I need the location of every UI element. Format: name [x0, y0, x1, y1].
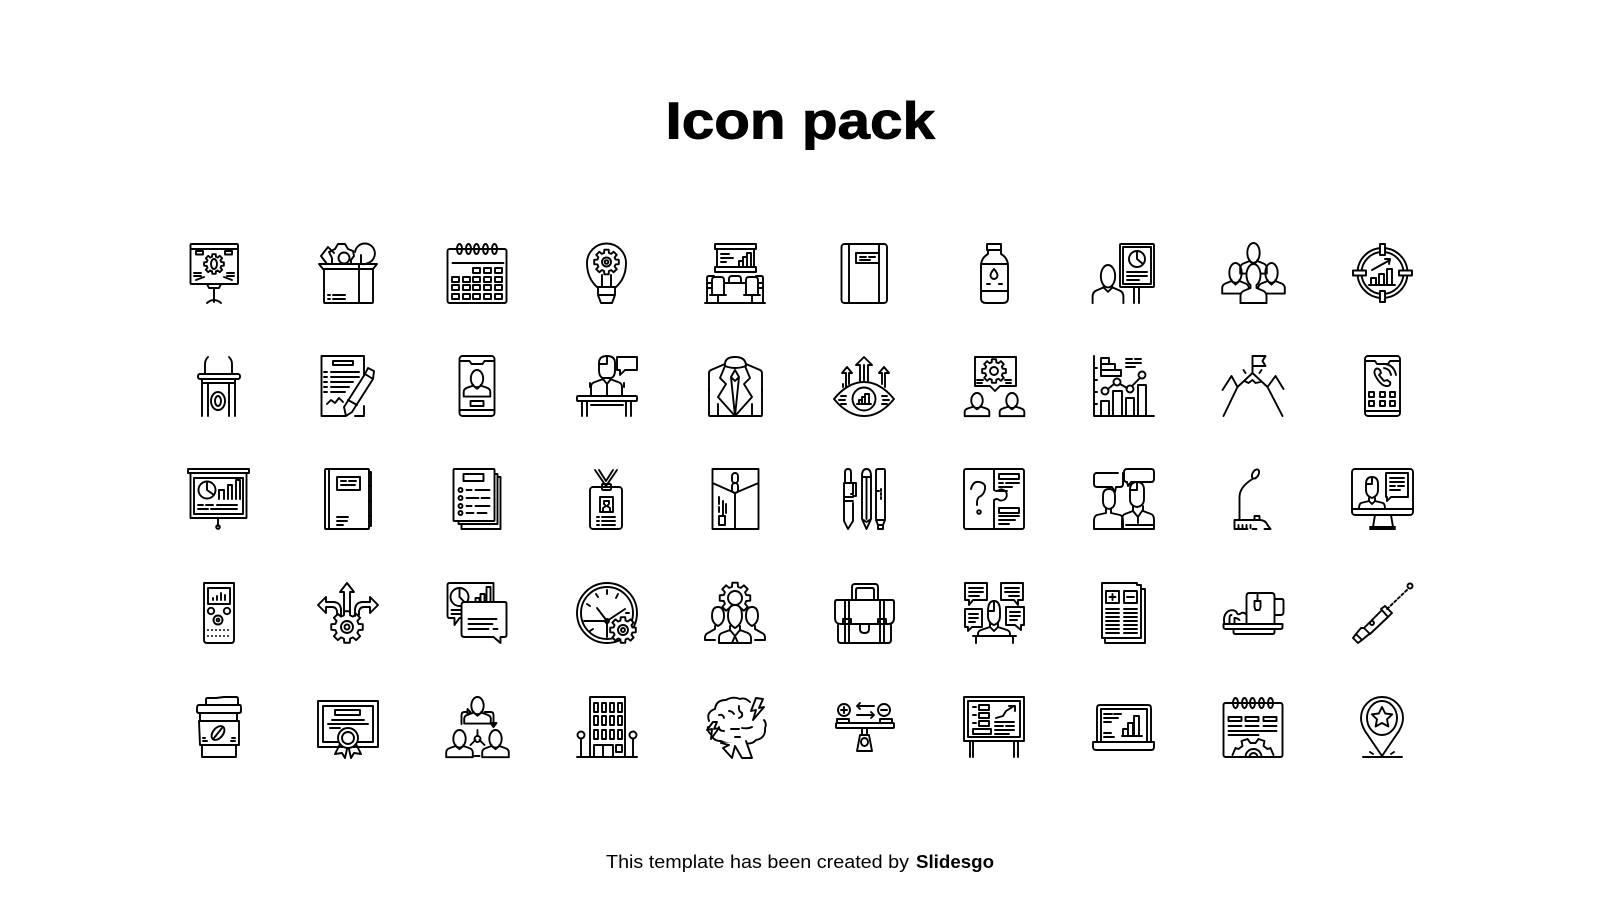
icon: phone with call	[1365, 356, 1400, 416]
icon: conference microphone	[1234, 468, 1270, 529]
icon: two people talking	[1094, 469, 1154, 529]
icon: notebook with tabs	[325, 469, 371, 529]
icon: team with gears	[705, 583, 765, 643]
icon: calendar	[448, 244, 506, 303]
icon: mug and pastry on tray	[1224, 593, 1284, 634]
icon: document stack	[454, 469, 500, 529]
icon: arrows from gear	[318, 583, 378, 643]
icon: document with pen	[322, 356, 374, 416]
icon: calendar with gear	[1224, 698, 1282, 757]
icon: voice recorder	[204, 583, 234, 643]
icon: projector screen	[188, 469, 249, 529]
icon: speaker at desk	[577, 356, 637, 416]
icon: monitor with video call	[1352, 469, 1413, 529]
icon: presentation board with gear	[190, 244, 238, 303]
icon: strategy board	[964, 697, 1024, 757]
icon: target with chart	[1353, 244, 1412, 302]
icon: charts and graphs	[1094, 356, 1154, 416]
icon: mountain with flag	[1222, 356, 1284, 416]
icon: meeting room	[705, 244, 765, 303]
icon: person with chart board	[1093, 244, 1154, 303]
icon: map pin with star	[1361, 697, 1403, 757]
footer credit: Slidesgo	[916, 852, 994, 872]
icon: laptop with chart	[1093, 705, 1154, 750]
icon: team group	[1222, 243, 1285, 303]
icon: suit	[709, 357, 762, 416]
icon: puzzle with question mark	[964, 469, 1024, 529]
icon: laser pointer	[1353, 584, 1412, 643]
icon: coffee cup	[197, 697, 241, 757]
icon: pens	[844, 469, 885, 529]
icon: brain with lightning	[707, 698, 766, 758]
icon: light bulb with gear	[587, 244, 626, 303]
icon: phone with profile	[460, 356, 494, 416]
icon: two people with gear bubble	[965, 357, 1024, 416]
title: Icon pack	[666, 92, 935, 150]
icon: notebook	[842, 244, 887, 303]
icon: water bottle	[981, 244, 1008, 303]
footer credit: This template has been created by	[606, 852, 909, 872]
icon: podium with microphones	[198, 357, 240, 416]
icon: briefcase	[835, 584, 894, 643]
icon: pros and cons sheet	[1102, 583, 1145, 643]
icon: clock with gear	[577, 583, 637, 643]
icon: box with ideas	[319, 243, 377, 303]
icon: certificate	[318, 701, 378, 758]
icon: envelope	[712, 469, 758, 529]
icon: person with speech bubbles	[965, 583, 1024, 643]
icon: office building	[577, 697, 637, 757]
icon: balance scale	[836, 703, 894, 751]
icon: people organisation	[446, 697, 509, 757]
icon: chat with chart	[448, 583, 506, 643]
icon grid	[188, 243, 1413, 758]
icon: ID badge with lanyard	[590, 470, 622, 529]
icon: eye with arrows	[834, 357, 894, 416]
